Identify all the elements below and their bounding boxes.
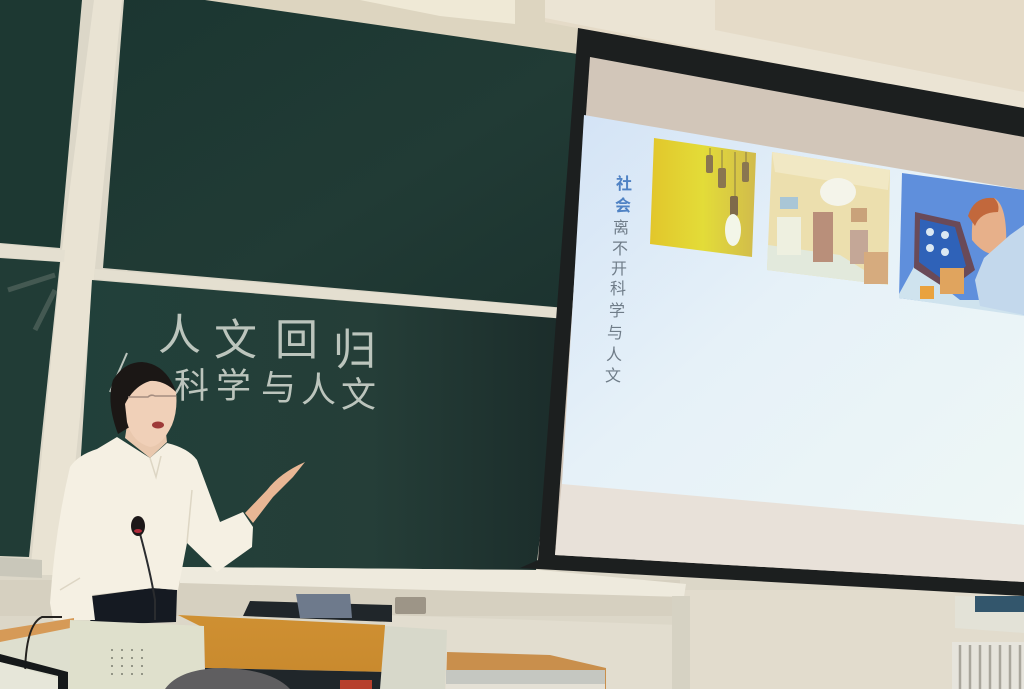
- hand and forearm: [245, 462, 305, 523]
- chalk handwriting: 科学与人文: [174, 367, 376, 415]
- chalk handwriting: [110, 312, 376, 415]
- mouth: [152, 422, 164, 428]
- monitor and stand behind lectern: [243, 594, 392, 622]
- projection screen casing: [520, 28, 1024, 596]
- speaker neck: [125, 425, 167, 458]
- lower main blackboard: [74, 280, 566, 570]
- speaker hair: [110, 362, 176, 434]
- audience head: [165, 668, 290, 689]
- wall switch: [395, 597, 426, 614]
- slide image: light bulbs on yellow: [650, 138, 756, 257]
- projector housing at ceiling: [853, 0, 997, 14]
- white blackboard post: [0, 0, 122, 578]
- slide text: society needs science and humanities: 社会: [615, 174, 632, 215]
- left blackboard panels: [0, 0, 82, 557]
- side table: [446, 652, 606, 689]
- blouse shading: [60, 456, 192, 590]
- bottom chalk tray: [180, 567, 686, 597]
- white speaker box right: [380, 626, 447, 689]
- projection screen: [555, 57, 1024, 582]
- speaker: [50, 362, 305, 625]
- top window frame: [190, 0, 1024, 115]
- chalk ledge between boards: [94, 269, 568, 319]
- speaker face: [125, 381, 176, 447]
- slide text: society needs science and humanities: [605, 174, 632, 385]
- red label on lectern front: [340, 680, 372, 689]
- wall column and window: [672, 596, 1024, 689]
- slide text: society needs science and humanities: 离不开科学与人文: [605, 219, 629, 385]
- slide image: scientist with specimens: [899, 173, 1024, 316]
- wooden lectern top: [0, 615, 385, 689]
- microphone: [131, 516, 155, 620]
- glasses: [128, 395, 176, 397]
- white blouse: [50, 437, 253, 620]
- slide image: hospital room: [767, 152, 890, 285]
- slide: [562, 115, 1024, 525]
- radiator: [952, 642, 1024, 689]
- white speaker box left: [0, 617, 204, 689]
- chalk handwriting: 人文回归: [158, 312, 376, 375]
- upper main blackboard: [103, 0, 578, 308]
- black trousers: [90, 588, 177, 625]
